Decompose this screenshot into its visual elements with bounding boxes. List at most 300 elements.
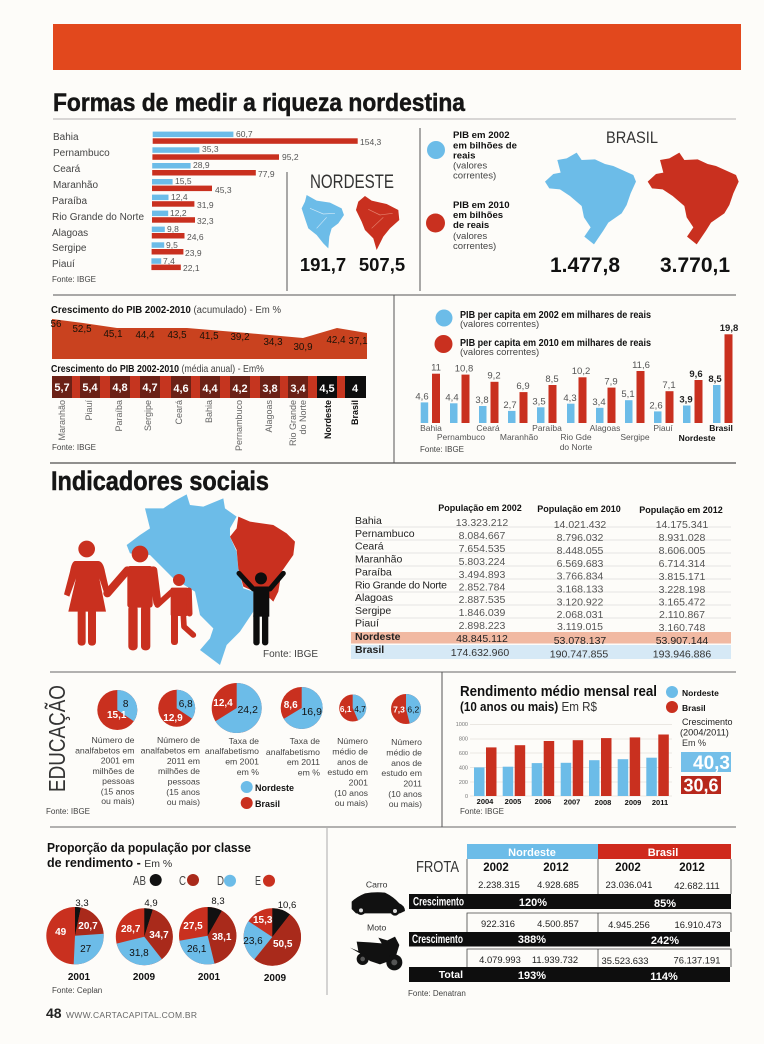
bar chart: PIB per capita: Paraíba [532,423,562,433]
icon: mulher [64,541,110,646]
pie: 2001: 49 [55,927,67,938]
panel: Nordeste: 507,5 [359,254,405,275]
panel: Brasil: BRASIL [606,128,658,147]
table: população: Piauí [355,618,379,630]
panel: Nordeste: 191,7 [300,254,346,275]
bar: crescimento moto: 388% [518,934,546,946]
captions: educação: (15 anos [101,786,135,796]
pie charts: classe de rendimento: 2009 [264,973,287,984]
table: população: 53.907.144 [656,635,708,647]
table: população: Sergipe [355,605,391,617]
pie: 2001: 20,7 [78,921,98,932]
chart: crescimento média anual: Paraíba [114,400,124,432]
pie: taxa 2011: 16,9 [301,706,322,718]
captions: educação: estudo em [381,768,422,778]
table: frota: 4.500.857 [537,918,579,929]
title: Formas de medir a riqueza nordestina: Formas de medir a riqueza nordestina [53,89,466,117]
table: frota: 4.079.993 [479,954,521,965]
table: frota: Nordeste [508,847,556,859]
legend: PIB 2002 e 2010: PIB em 2010 [453,200,510,211]
pie charts: classe de rendimento: 2009 [133,972,156,983]
pie: 2009 (segundo) [243,900,301,966]
legend: classes [133,873,275,888]
captions: educação: ou mais) [101,796,135,806]
table: frota: Brasil [648,847,678,859]
bar chart: PIB por estado 2002 e 2010: 32,3 [197,216,214,226]
table: população: Pernambuco [355,528,415,540]
bar chart: rendimento: 0 [465,794,468,800]
bar: crescimento moto: 242% [651,935,679,947]
pie: 2009 [116,898,173,965]
bar chart: rendimento: 2009 [625,798,641,807]
bar chart: PIB per capita: 7,1 [662,380,676,391]
bar chart: rendimento: 600 [459,751,468,757]
bar chart: PIB per capita: Bahia [420,423,442,433]
legend: classes: D [217,873,224,888]
heading: proporção da população: de rendimento - Em % [47,856,172,870]
source: IBGE (rendimento): Fonte: IBGE [460,807,504,816]
chart: crescimento acumulado: 45,1 [103,329,123,340]
bar chart: PIB por estado 2002 e 2010: 31,9 [197,200,214,210]
bar chart: PIB per capita: Pernambuco [437,432,485,442]
source: IBGE (educação): Fonte: IBGE [46,807,90,816]
pie: anos de estudo 2001: 4,7 [354,704,366,714]
icon: moto: Moto [367,923,386,933]
title: Indicadores sociais: Indicadores sociais [51,466,269,496]
captions: educação: estudo em [327,767,368,777]
bar chart: PIB per capita: Piauí [653,423,673,433]
bar: total: 114% [650,971,678,983]
map: Brasil azul [127,494,253,665]
bar: total: 193% [518,970,546,982]
bar chart: PIB per capita: 9,6 [689,369,703,380]
legend: PIB 2002 e 2010 [426,130,517,252]
callout: crescimento 2004/2011: (2004/2011) [680,728,729,738]
bar chart: PIB per capita: 3,4 [592,397,606,408]
bar chart: PIB per capita: Brasil [709,423,733,433]
bar chart: PIB por estado 2002 e 2010: 9,5 [166,240,178,250]
captions: educação: em 2011 [287,757,320,767]
table: população: 53.078.137 [554,635,606,647]
legend: PIB 2002 e 2010: correntes) [453,241,496,252]
captions: educação: milhões de [92,766,135,776]
legend: PIB 2002 e 2010: PIB em 2002 [453,130,510,141]
table: frota: 2002 [615,862,641,874]
table: população: 48.845.112 [456,633,508,645]
pie: 2009: 28,7 [121,924,141,935]
table: população: 6.714.314 [659,558,706,570]
map: Nordeste vermelho [230,517,295,602]
chart: crescimento acumulado: Crescimento do PIB 2002-2010 (acumulado) - Em % [51,305,281,316]
table: população: 3.168.133 [557,584,604,596]
captions: educação: em % [237,767,259,777]
bar chart: PIB per capita: do Norte [560,442,593,452]
pie: anos de estudo 2011 [391,694,421,724]
bar chart: PIB per capita: Rio Gde [560,432,592,442]
chart: crescimento acumulado: 52,5 [72,324,92,335]
callout: crescimento 2004/2011: Crescimento [682,717,733,727]
bar chart: PIB por estado 2002 e 2010: Alagoas [52,228,88,239]
legend: PIB per capita: PIB per capita em 2002 em milhares de reais [460,310,652,321]
bar chart: PIB per capita: 3,8 [475,395,489,406]
captions: educação: Número de [92,735,135,745]
table: população: 3.120.922 [557,596,604,608]
pie: analfabetos 2001 [97,690,137,730]
captions: educação: (10 anos [388,789,423,799]
table: população: 8.606.005 [659,545,706,557]
callout: crescimento 2004/2011: 30,6 [683,776,719,796]
bar chart: PIB per capita: 2,6 [649,400,663,412]
pie: taxa 2001: 24,2 [237,704,258,716]
table: frota: 42.682.111 [674,880,720,891]
bar chart: PIB por estado 2002 e 2010: 12,4 [171,192,188,202]
bar chart: rendimento: 2007 [564,798,580,806]
chart: crescimento média anual: Crescimento do PIB 2002-2010 (média anual) - Em% [51,364,264,375]
chart: crescimento média anual: Bahia [204,400,214,423]
table: população: Bahia [355,515,382,527]
top banner [53,24,741,70]
pie: 2001: 27 [80,944,92,955]
legend: rendimento [666,686,719,713]
table: população: 8.931.028 [659,532,706,544]
source: IBGE (crescimento): Fonte: IBGE [52,443,96,452]
chart: crescimento acumulado: 44,4 [135,330,155,341]
chart: crescimento acumulado: 30,9 [293,342,313,353]
legend: PIB 2002 e 2010: (valores [453,231,487,242]
heading: rendimento médio: Rendimento médio mensal real [460,683,657,700]
legend: PIB 2002 e 2010: (valores [453,160,487,172]
captions: educação: analfabetos em [75,746,134,756]
pie: 2001 (segundo): 8,3 [211,896,225,907]
pie: 2001 (segundo) [179,896,236,964]
table: frota: 2.238.315 [478,879,520,890]
source: Ceplan: Fonte: Ceplan [52,986,102,995]
map: Nordeste 2002 [302,195,344,248]
bar chart: PIB per capita: 11,6 [632,360,650,371]
table: população: 6.569.683 [557,558,604,570]
icon: carro: Carro [366,880,388,890]
pie: analfabetos 2011 [158,690,195,727]
panel: Brasil: 3.770,1 [660,254,730,277]
captions: educação: 2011 [403,778,422,788]
icon: carro [352,880,405,916]
legend: classes: AB [133,873,146,888]
chart: crescimento média anual [51,364,366,451]
panel: Nordeste: NORDESTE [310,172,394,193]
icon: homem [107,546,157,650]
bar chart: rendimento: 2005 [505,797,521,806]
pie: analfabetos 2001: 15,1 [107,710,127,721]
table: frota: 4.945.256 [608,919,650,930]
captions: educação: Taxa de [290,736,320,746]
captions: educação: analfabetismo [205,746,259,756]
bar chart: rendimento: 200 [459,780,468,786]
table: população: 5.803.224 [459,556,506,568]
bar chart: PIB per capita: 6,9 [516,381,530,392]
bar chart: PIB per capita: 10,8 [455,364,473,374]
bar chart: PIB per capita: 3,5 [532,396,546,408]
chart: crescimento média anual: 4,4 [202,383,219,395]
icon: criança [157,574,193,645]
chart: crescimento acumulado: 37,1 [348,336,368,347]
pie charts: classe de rendimento: 2001 [68,972,91,983]
bar chart: PIB per capita: 19,8 [720,323,738,334]
pie: analfabetos 2011: 6,8 [179,699,193,710]
captions: educação: pessoas [168,776,201,786]
chart: crescimento média anual: 4 [352,383,359,395]
pie: 2001 (segundo): 38,1 [212,932,232,943]
chart: crescimento acumulado: 42,4 [326,335,346,346]
panel: Brasil: 1.477,8 [550,254,620,277]
pie: 2001 (segundo): 27,5 [183,921,203,932]
bar chart: PIB per capita: Maranhão [500,432,538,442]
captions: educação: médio de [332,746,368,756]
heading: proporção da população [47,840,251,870]
table: frota: 76.137.191 [674,954,720,966]
table: população: População em 2012 [639,505,723,515]
icon: pessoa preta [239,572,283,645]
pie: taxa 2011 [281,687,323,729]
map: Brasil 2010 [648,153,739,244]
bar chart: PIB per capita: 9,2 [487,370,501,382]
legend: educação: Brasil [255,799,280,809]
bar chart: rendimento: 2004 [477,797,494,806]
page number and URL: WWW.CARTACAPITAL.COM.BR [66,1010,197,1020]
source: Denatran: Fonte: Denatran [408,989,466,998]
illustration: mapa do Brasil com família [64,494,295,665]
chart: crescimento média anual: 4,6 [173,383,189,395]
pie: 2009 (segundo): 50,5 [273,939,293,950]
chart: crescimento média anual: 3,8 [262,383,278,395]
legend: PIB 2002 e 2010: em bilhões de [453,140,517,152]
bar chart: PIB por estado 2002 e 2010: Ceará [53,164,81,175]
bar chart: rendimento: 2006 [535,797,551,806]
legend: PIB per capita: (valores correntes) [460,347,539,358]
pie: analfabetos 2001: 8 [123,699,129,710]
table: população: 3.494.893 [459,569,506,581]
table: frota: 35.523.633 [602,955,648,966]
legend: PIB 2002 e 2010: de reais [453,220,489,231]
bar chart: rendimento: 2008 [595,798,611,807]
bar chart: PIB por estado 2002 e 2010: 12,2 [170,208,187,218]
table: população: Maranhão [355,554,402,566]
captions: educação: 2001 [349,778,368,788]
table: população: População em 2010 [537,504,621,514]
table: população: 8.084.667 [459,530,506,542]
table: população: 190.747.855 [550,648,608,660]
pie: 2009: 4,9 [144,898,158,909]
pie charts: classe de rendimento [46,896,301,984]
table: população: 8.796.032 [557,532,604,544]
table: população: 1.846.039 [459,607,506,619]
bar chart: PIB per capita: Sergipe [620,432,650,442]
captions: educação: (10 anos [334,788,369,798]
chart: crescimento média anual: Alagoas [264,400,274,433]
table: frota: 922.316 [481,918,515,929]
bar chart: PIB por estado 2002 e 2010: 45,3 [215,185,232,195]
captions: educação [75,735,423,809]
chart: crescimento acumulado: 56 [51,319,62,330]
bar chart: PIB per capita: Alagoas [590,423,620,433]
bar chart: PIB per capita: 5,1 [621,389,635,400]
chart: crescimento média anual: 4,7 [142,382,158,394]
table: frota: 2012 [543,862,569,874]
table: população: Alagoas [355,592,393,604]
captions: educação: em % [298,768,320,778]
chart: crescimento média anual: 5,7 [54,382,70,394]
source: IBGE (PIB): Fonte: IBGE [52,275,96,284]
bar chart: PIB per capita: 8,5 [708,374,722,385]
bar chart: rendimento [456,722,672,807]
bar chart: PIB por estado 2002 e 2010: 60,7 [236,129,253,139]
pie: 2001 (segundo): 26,1 [187,944,207,955]
bar chart: PIB por estado 2002 e 2010: 154,3 [360,137,382,147]
bar chart: PIB por estado 2002 e 2010 [52,129,382,273]
table: população: 3.766.834 [557,570,604,582]
chart: crescimento média anual: 3,4 [290,383,307,395]
chart: crescimento acumulado [51,305,368,359]
page number and URL: 48 [46,1005,62,1021]
chart: crescimento média anual: Sergipe [143,400,153,431]
captions: educação: Número [391,737,422,747]
chart: crescimento média anual: Maranhão [57,400,67,441]
chart: crescimento acumulado: 43,5 [167,330,187,341]
pie: 2009: 34,7 [149,930,169,941]
map: Brasil 2002 [545,153,636,244]
chart: crescimento média anual: Piauí [84,400,94,421]
pie: anos de estudo 2011: 7,3 [393,704,405,714]
bar chart: PIB por estado 2002 e 2010: 9,8 [167,224,179,234]
bar chart: rendimento: 1000 [456,722,468,728]
bar chart: PIB per capita [415,323,738,452]
captions: educação: analfabetismo [266,747,320,757]
chart: crescimento acumulado: 39,2 [230,332,250,343]
pie: 2001 [46,898,104,964]
bar chart: PIB por estado 2002 e 2010: Maranhão [53,180,98,191]
legend: PIB per capita: PIB per capita em 2010 em milhares de reais [460,338,652,349]
legend: classes: E [255,873,261,888]
table: população: 13.323.212 [456,517,508,529]
table: população: Brasil [355,644,384,656]
legend: PIB 2002 e 2010: reais [453,150,475,162]
chart: crescimento média anual: Ceará [174,400,184,425]
captions: educação: anos de [391,758,422,768]
bar chart: PIB por estado 2002 e 2010: 24,6 [187,232,204,242]
table: população: 174.632.960 [451,647,509,659]
pie: 2009: 31,8 [129,948,149,959]
pie: taxa 2001 [212,683,262,733]
captions: educação: ou mais) [335,798,368,808]
bar chart: PIB por estado 2002 e 2010: Pernambuco [53,148,110,159]
bar chart: PIB per capita: 4,6 [415,392,429,402]
legend: educação [241,781,294,809]
bar: crescimento carro [409,894,731,910]
bar chart: PIB por estado 2002 e 2010: 35,3 [202,144,219,154]
table: frota: 4.928.685 [537,879,579,890]
bar chart: PIB per capita: 2,7 [503,400,517,411]
legend: rendimento: Brasil [682,703,706,713]
bar chart: rendimento: 800 [459,736,468,742]
table: população: 14.175.341 [656,519,708,531]
bar: total: Total [439,969,463,981]
map: Nordeste 2010 [356,196,399,250]
captions: educação: em 2001 [225,756,259,766]
table: população: Paraíba [355,566,392,578]
panel: Nordeste [300,172,405,275]
chart: crescimento média anual: 4,2 [232,383,248,395]
bar chart: rendimento: 400 [459,766,468,772]
bar: crescimento carro: 120% [519,897,547,909]
chart: crescimento média anual: 5,4 [82,382,99,394]
legend: PIB 2002 e 2010: em bilhões [453,210,503,221]
bar chart: PIB per capita: 10,2 [572,366,590,377]
table: população: Ceará [355,540,384,552]
captions: educação: analfabetos em [141,746,200,756]
bar chart: PIB per capita: 3,9 [679,394,693,406]
legend: PIB per capita [434,310,652,358]
chart: crescimento acumulado: 41,5 [199,331,219,342]
icon: moto [350,923,402,970]
captions: educação: ou mais) [389,799,422,809]
callout: crescimento 2004/2011 [680,717,733,796]
heading: rendimento médio: (10 anos ou mais) Em R$ [460,699,598,714]
table: frota: FROTA [416,859,459,876]
pie: analfabetos 2011: 12,9 [163,713,183,724]
table: população: Nordeste [355,631,401,643]
heading: Educação: EDUCAÇÃO [44,685,70,792]
pie: 2009 (segundo): 15,3 [253,915,273,926]
table: frota: 2002 [483,862,509,874]
bar chart: PIB por estado 2002 e 2010: 22,1 [183,263,200,273]
bar chart: PIB per capita: Nordeste [679,433,716,443]
pie: 2001: 3,3 [75,898,89,909]
captions: educação: 2011 em [167,756,200,766]
table: frota: 11.939.732 [532,954,578,965]
chart: crescimento média anual: Pernambuco [234,400,244,451]
captions: educação: anos de [337,757,368,767]
bar chart: PIB per capita: 4,4 [445,392,459,404]
bar chart: PIB por estado 2002 e 2010: Rio Grande do Norte [52,212,144,223]
legend: rendimento: Nordeste [682,688,719,698]
chart: crescimento média anual: 4,5 [319,383,335,395]
pie charts: educação [97,683,421,733]
bar: crescimento moto: Crescimento [412,932,463,946]
table: população: 3.160.748 [659,622,706,634]
pie: 2009 (segundo): 10,6 [278,900,296,911]
bar chart: PIB por estado 2002 e 2010: Bahia [53,132,79,143]
page number and URL [46,1005,197,1021]
pie: anos de estudo 2011: 6,2 [407,704,419,714]
table: população [351,503,731,660]
table: frota [409,844,731,983]
table: frota: 23.036.041 [606,879,652,890]
bar: crescimento moto [409,932,730,947]
bar: crescimento carro: Crescimento [413,894,464,908]
pie: anos de estudo 2001: 6,1 [340,704,352,714]
table: população: 2.110.867 [659,609,705,621]
table: frota: 16.910.473 [675,919,721,930]
captions: educação: Número de [157,735,200,745]
chart: crescimento média anual: do Norte [298,400,308,435]
chart: crescimento média anual: 4,8 [112,382,128,394]
pie: taxa 2001: 12,4 [213,698,233,709]
callout: crescimento 2004/2011: Em % [682,738,706,748]
table: população: 3.815.171 [659,571,706,583]
bar chart: PIB per capita: Ceará [476,423,500,433]
table: população: 3.119.015 [557,621,603,633]
captions: educação: milhões de [158,766,200,776]
table: população: 193.946.886 [653,648,711,660]
